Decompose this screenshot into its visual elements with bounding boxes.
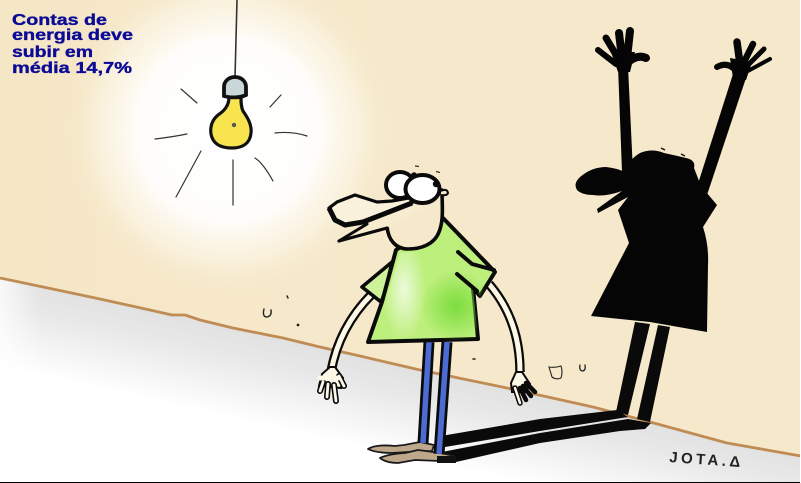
bulb glass [211,97,251,148]
filament [232,123,236,127]
skirting line [0,278,801,456]
icon: light bulb [155,0,307,205]
shoes [368,442,456,463]
right arm [489,284,535,403]
man [319,166,535,463]
shadow: dress and head [576,150,717,332]
socket [224,77,246,97]
cord [235,0,237,78]
left arm [319,294,372,401]
shadow: legs [616,322,670,422]
head and nose [329,190,442,249]
shadow: right arm and hand [696,42,770,195]
eyes [386,166,448,203]
floor [0,280,800,482]
shadow on the wall and floor [437,31,770,462]
shadow: legs on floor [437,410,651,462]
headline text: Contas de [12,12,107,29]
specks on the wall [263,296,585,379]
headline text [12,12,133,77]
shadow: brow marks [661,148,685,156]
legs [423,342,456,463]
shadow: left arm and hand [598,31,646,172]
green shirt [362,218,495,342]
headline text: subir em [12,44,93,61]
signature: JOTA.Δ [669,449,741,471]
light rays [155,89,307,205]
headline text: energia deve [12,27,133,44]
headline text: média 14,7% [12,60,132,77]
